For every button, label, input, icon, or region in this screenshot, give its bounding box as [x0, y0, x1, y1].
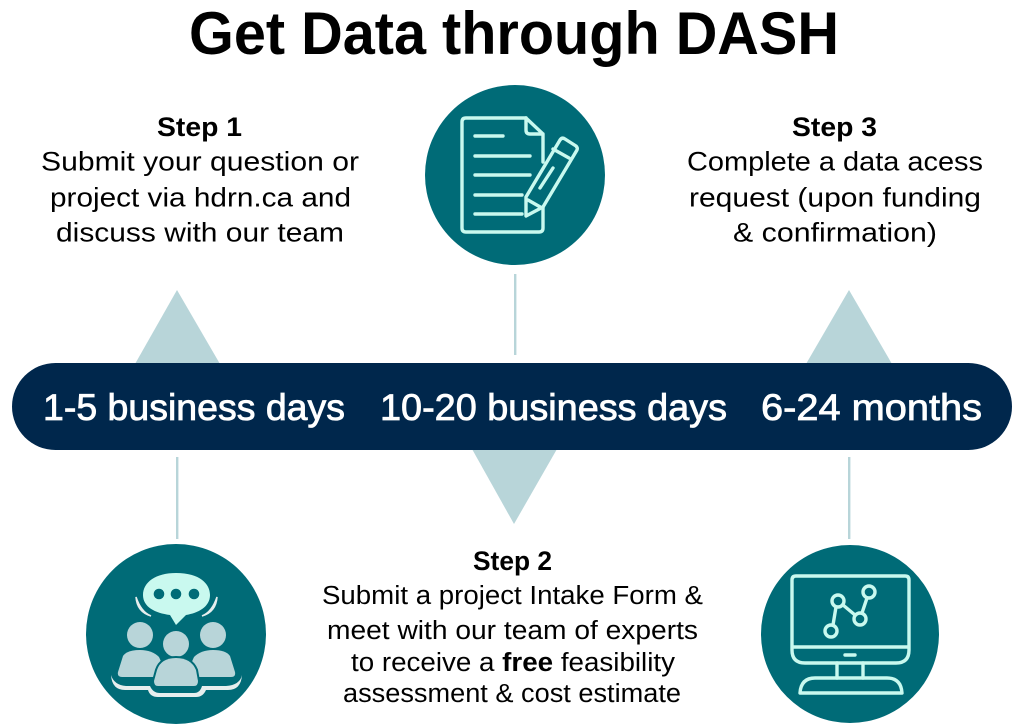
text block: step 2: meet with our team of experts: [327, 617, 698, 645]
connector: step 1: [176, 457, 178, 539]
text block: step 3: & confirmation): [733, 218, 937, 248]
text block: step 2: to receive a free feasibility: [351, 649, 675, 677]
text block: step 1: project via hdrn.ca and: [50, 182, 351, 212]
connector: step 2: [514, 274, 516, 355]
title: Get Data through DASH: [189, 0, 839, 67]
text block: step 3: request (upon funding: [689, 182, 981, 212]
text block: step 1: discuss with our team: [56, 218, 344, 248]
arrow: step 2 down: [472, 449, 557, 524]
speech bubble: [143, 573, 210, 625]
text block: step 2: Submit a project Intake Form &: [322, 582, 703, 610]
icon: group discussion: [86, 544, 266, 724]
text block: step 2: assessment & cost estimate: [343, 680, 681, 708]
base shadow: [111, 675, 242, 697]
icon: monitor with line chart: [761, 545, 939, 723]
text block: step 2: [322, 546, 703, 708]
text block: step 1: [41, 112, 359, 248]
arrow: step 3 up: [806, 290, 892, 364]
text block: step 2: Step 2: [473, 546, 552, 576]
timeline bar: [12, 363, 1012, 450]
text block: step 1: Submit your question or: [41, 146, 359, 176]
duration: step 3: 6-24 months: [761, 387, 982, 428]
connector: step 3: [848, 457, 850, 539]
arrow: step 1 up: [135, 290, 220, 364]
text block: step 3: [687, 112, 983, 248]
duration: step 2: 10-20 business days: [380, 387, 727, 428]
duration: step 1: 1-5 business days: [43, 387, 345, 428]
text block: step 1: Step 1: [157, 112, 242, 142]
icon: document and pencil: [425, 85, 605, 265]
text block: step 3: Step 3: [792, 112, 877, 142]
text block: step 3: Complete a data acess: [687, 146, 983, 176]
bubble shadows: [136, 597, 217, 616]
people: [127, 622, 153, 648]
